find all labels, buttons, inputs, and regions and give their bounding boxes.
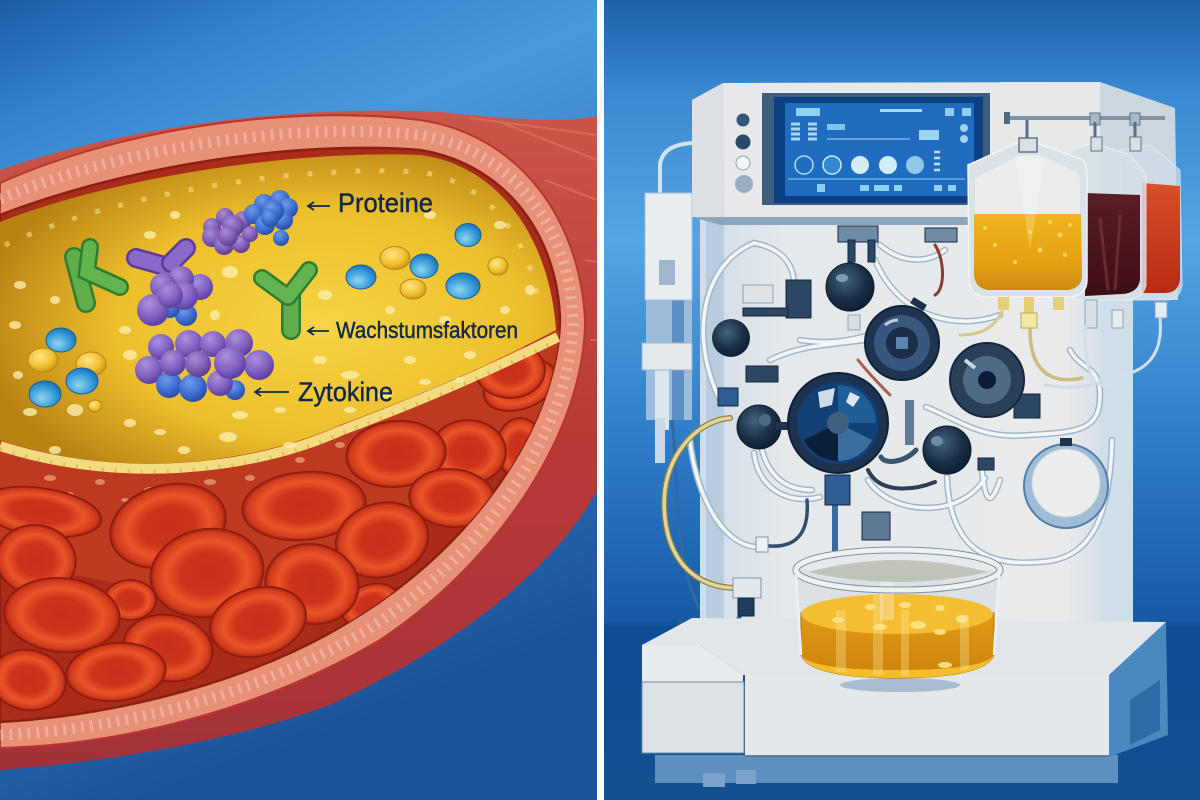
bag: plasma — [968, 138, 1087, 328]
label: Proteine: Proteine — [338, 188, 433, 218]
protein: purple cluster — [202, 208, 258, 255]
indicator buttons — [735, 114, 753, 193]
white reservoir disc — [1024, 438, 1108, 528]
pump: lower right small — [923, 426, 971, 474]
panel: blood vessel — [0, 0, 597, 800]
machine head — [692, 82, 1178, 300]
beads: right group — [346, 224, 508, 299]
growth factor: green molecule left — [74, 247, 120, 303]
label: Proteine — [306, 192, 432, 212]
pump: top small — [826, 263, 874, 311]
growth factor: green y molecule — [262, 270, 309, 330]
panel: apheresis machine — [604, 0, 1200, 800]
pump: centre medium — [865, 300, 939, 380]
beads: left group — [28, 328, 106, 412]
left side module — [642, 143, 720, 630]
connectors and valves — [718, 226, 1040, 616]
pump: left lower small — [737, 405, 792, 449]
label: Wachstumsfaktoren — [306, 320, 517, 338]
machine body — [700, 210, 1133, 640]
vessel wall — [0, 111, 597, 770]
tubes: clear and coloured — [664, 243, 1129, 637]
pump: right medium — [950, 343, 1024, 417]
bag: dark — [1070, 137, 1160, 385]
label: Zytokine: Zytokine — [298, 377, 393, 407]
collection beaker — [796, 550, 1000, 692]
label: Wachstumsfaktoren: Wachstumsfaktoren — [336, 317, 518, 343]
red blood cells — [0, 330, 564, 716]
pump: left small — [712, 319, 750, 357]
cytokine: purple large cluster — [135, 329, 274, 402]
pump: large central — [788, 373, 888, 473]
plasma layer — [0, 154, 558, 472]
protein: blue cluster — [244, 190, 298, 246]
bag rail — [1004, 112, 1165, 140]
label: Zytokine — [254, 381, 392, 407]
cytokine: purple x molecule — [136, 248, 213, 326]
touchscreen — [762, 93, 990, 205]
bag: red — [1120, 137, 1182, 318]
base unit — [642, 618, 1168, 787]
